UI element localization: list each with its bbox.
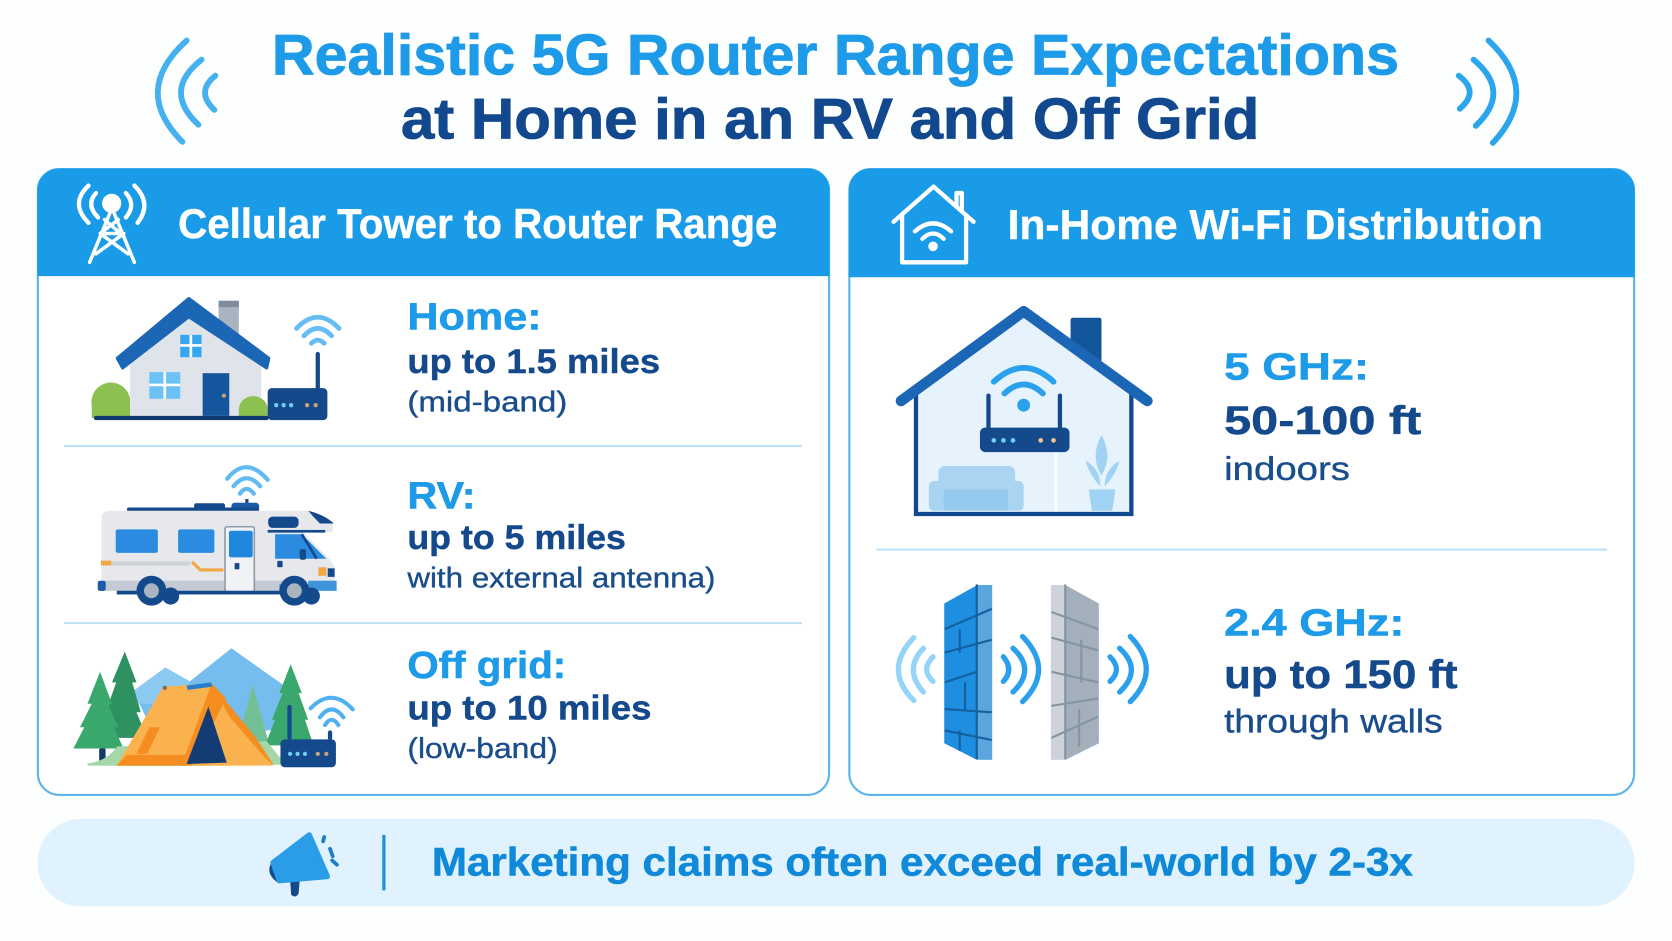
heading: cellular: Cellular Tower to Router Range	[178, 200, 777, 247]
row: off grid	[73, 644, 652, 767]
signal waves right	[1110, 637, 1146, 702]
text: rv range: up to 5 miles	[407, 519, 626, 557]
signal waves center	[1003, 637, 1039, 702]
panel: cellular tower to router range	[37, 168, 830, 795]
text: home range: Home:	[407, 295, 542, 338]
callout: marketing claims	[37, 819, 1635, 906]
row: rv	[98, 467, 716, 606]
illustration: tent camp	[73, 648, 353, 767]
row: 2.4 ghz	[898, 584, 1458, 760]
router with wi-fi	[980, 368, 1070, 452]
text: home range	[407, 295, 660, 419]
text: 5 ghz range: indoors	[1224, 451, 1350, 488]
icon: cell tower	[79, 186, 144, 262]
text: rv range: RV:	[407, 475, 476, 518]
title: Realistic 5G Router Range Expectations	[272, 24, 1399, 88]
plant	[1086, 435, 1120, 511]
illustration: house cross-section with router	[901, 311, 1147, 514]
icon: left signal waves	[158, 41, 215, 142]
tent	[117, 682, 274, 766]
text: 5 ghz range: 50-100 ft	[1224, 399, 1421, 443]
illustration: house with router	[91, 299, 339, 420]
row: 5 ghz	[901, 311, 1421, 514]
text: home range: up to 1.5 miles	[407, 343, 660, 381]
panel header: cellular	[37, 168, 830, 276]
text: rv range: with external antenna)	[406, 563, 716, 595]
text: 5 ghz range: 5 GHz:	[1224, 346, 1369, 389]
text: 2.4 ghz range: up to 150 ft	[1224, 653, 1458, 697]
icon: right signal waves	[1459, 41, 1516, 143]
row: home	[91, 295, 660, 420]
icon: home router	[268, 317, 339, 420]
gray brick wall	[1051, 584, 1099, 760]
icon: house with wi-fi	[894, 187, 974, 262]
panel: in-home wi-fi distribution	[849, 168, 1635, 795]
blue brick wall	[944, 584, 992, 760]
title	[272, 24, 1399, 152]
icon: off-grid router	[280, 698, 353, 767]
text: 2.4 ghz range: through walls	[1224, 704, 1443, 741]
callout text: Marketing claims often exceed real-world by 2-3x	[432, 840, 1413, 884]
heading: wi-fi: In-Home Wi-Fi Distribution	[1008, 201, 1543, 248]
wheels	[137, 576, 320, 606]
text: 2.4 ghz range: 2.4 GHz:	[1224, 602, 1404, 645]
icon: megaphone	[269, 835, 337, 897]
text: off grid range: (low-band)	[407, 733, 558, 765]
text: off grid range: Off grid:	[407, 644, 566, 687]
signal waves left	[898, 638, 933, 701]
text: off grid range: up to 10 miles	[407, 690, 652, 728]
panel header: wi-fi	[849, 168, 1635, 277]
text: rv range	[406, 475, 716, 595]
title: at Home in an RV and Off Grid	[401, 88, 1259, 152]
text: home range: (mid-band)	[407, 387, 567, 419]
text: 2.4 ghz range	[1224, 602, 1458, 741]
illustration: motorhome	[98, 467, 337, 606]
sofa	[929, 466, 1024, 511]
rv body	[101, 511, 335, 591]
illustration: signal through walls	[898, 584, 1146, 760]
text: off grid range	[407, 644, 652, 765]
text: 5 ghz range	[1224, 346, 1421, 488]
